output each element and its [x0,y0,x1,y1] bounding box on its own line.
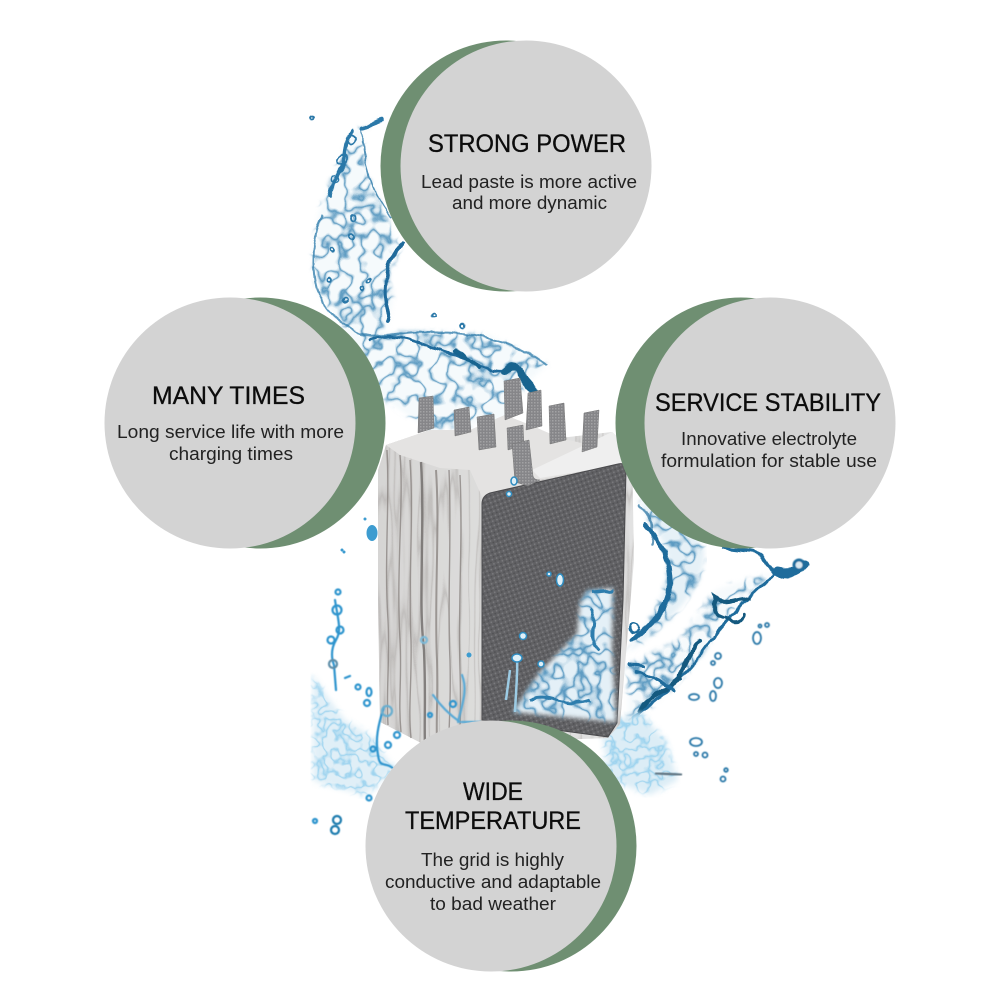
water splash: lower right [600,712,682,795]
rising jet [506,655,517,712]
droplets [689,560,804,782]
feature: many times [104,298,386,548]
disc [104,298,356,548]
description: and more dynamic [452,193,607,213]
feature: wide temperature [366,720,636,972]
disc [644,298,896,548]
water body [513,588,616,722]
water splash: lower left [313,518,480,834]
feature: strong power [380,40,652,292]
heading: MANY TIMES [152,382,305,410]
water splash: right swirl and tendril [628,500,806,782]
front tab [512,440,540,486]
dark plate [482,464,626,737]
description: Innovative electrolyte [681,429,857,449]
description [385,850,601,914]
battery [378,378,634,745]
description: conductive and adaptable [385,872,601,892]
disc [400,40,652,292]
water over plate [506,477,616,722]
crescent [616,298,866,548]
battery tabs [418,378,599,452]
solid droplets [340,518,472,658]
veil [600,712,678,795]
description: Lead paste is more active [421,172,637,192]
strands [312,116,545,392]
description [421,172,637,213]
strands and droplets [313,590,480,834]
disc [366,720,616,972]
description: to bad weather [430,894,556,914]
description [117,422,344,464]
veil [313,675,395,795]
description: formulation for stable use [661,451,877,471]
droplets [506,477,564,667]
top surfaces [386,415,632,497]
plate edge lines [387,450,461,745]
crescent [386,720,636,972]
description [661,429,877,471]
heading: WIDE [463,778,523,806]
plate stack [378,415,634,745]
crescent [134,298,386,548]
water splash: upper left [312,116,547,430]
heading [405,778,581,835]
description: charging times [169,444,293,464]
description: The grid is highly [421,850,564,870]
water strand [530,590,612,703]
heading: STRONG POWER [428,130,626,158]
feature: service stability [616,298,896,548]
heading: SERVICE STABILITY [655,389,881,417]
swirl veil [628,500,704,652]
tendril veil [628,570,778,725]
description: Long service life with more [117,422,344,442]
strands [628,505,806,720]
veil [312,118,547,430]
heading: TEMPERATURE [405,807,581,835]
front plate wrapper [532,432,632,478]
dark edge [655,773,682,775]
crescent [380,40,632,292]
